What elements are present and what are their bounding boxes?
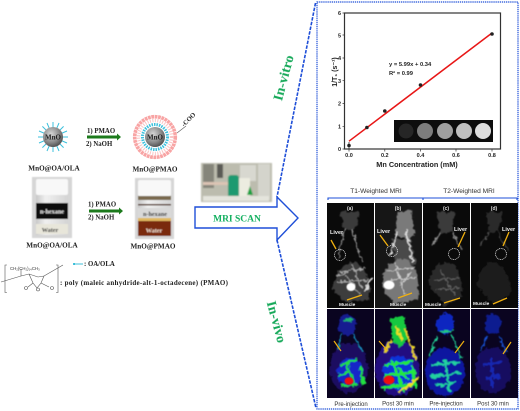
chart: relaxivity 1/T1 vs Mn concentration: 1/T₁ (s⁻¹) xyxy=(332,57,339,87)
captions: colour map panels: Pre-injection xyxy=(429,402,463,408)
labels: upper particle names: MnO@OA/OLA xyxy=(28,164,81,172)
captions: colour map panels: Pre-injection xyxy=(334,402,368,408)
vial photo: MnO@PMAO: Water xyxy=(146,228,162,234)
colour map panel b xyxy=(375,309,422,398)
colour map panel c xyxy=(423,309,470,398)
labels: vial names: MnO@PMAO xyxy=(130,242,176,250)
MRI panel a: (a) xyxy=(347,206,353,212)
dashed connector lines and in-vivo box xyxy=(277,2,518,409)
MRI panel a: Muscle xyxy=(339,302,356,308)
headings: T1 and T2 weighted MRI: T2-Weighted MRI xyxy=(443,188,495,195)
x axis ticks xyxy=(345,153,496,159)
colour map panel d xyxy=(471,309,518,398)
polymer structure: PMAO xyxy=(1,265,63,292)
MRI panel d: (d) xyxy=(491,206,498,212)
particle: MnO@PMAO xyxy=(135,111,197,157)
vial photo: MnO@PMAO: n-hexane xyxy=(143,211,167,218)
particle: MnO@PMAO: MnO xyxy=(147,134,164,142)
MRI panel b: Muscle xyxy=(390,302,407,308)
equation: y = 5.99x + 0.34 xyxy=(389,62,432,68)
MRI panel b: Liver xyxy=(377,229,391,235)
arrow: reaction step 1: 2) NaOH xyxy=(86,141,113,148)
y axis ticks: 2 xyxy=(338,102,341,108)
MRI panel d: Liver xyxy=(502,227,516,233)
colour map panel a xyxy=(327,309,374,398)
y axis ticks: 0 xyxy=(338,147,341,153)
MRI panel d: Muscle xyxy=(473,301,490,307)
labels: upper particle names xyxy=(28,164,178,174)
MRI panel c: Liver xyxy=(454,227,468,233)
headings: T1 and T2 weighted MRI xyxy=(328,188,517,200)
arrow: reaction step 1 xyxy=(86,128,121,148)
labels: upper particle names: MnO@PMAO xyxy=(132,166,178,174)
arrow: reaction step 2 xyxy=(88,202,123,222)
labels: vial names: MnO@OA/OLA xyxy=(26,242,79,250)
MRI panel a: Liver xyxy=(330,230,344,236)
vial photo: MnO@PMAO xyxy=(135,178,174,239)
arrow: reaction step 2: 2) NaOH xyxy=(88,214,115,222)
label: PMAO description: : poly (maleic anhydride-alt-1-octadecene) (PMAO) xyxy=(60,279,229,287)
label: In-vitro: In-vitro xyxy=(271,54,298,102)
photo: MRI scanner xyxy=(201,163,272,202)
chart: relaxivity 1/T1 vs Mn concentration xyxy=(332,11,500,169)
y axis ticks: 6 xyxy=(338,11,341,17)
liver marker xyxy=(334,250,346,260)
y axis ticks: 3 xyxy=(338,79,341,85)
big arrow: MRI SCAN xyxy=(195,197,298,240)
vial photo: MnO@OA/OLA xyxy=(32,177,72,238)
y axis ticks: 1 xyxy=(338,124,341,130)
x axis ticks: 0.4 xyxy=(417,153,425,159)
chart: relaxivity 1/T1 vs Mn concentration: R² = 0.99 xyxy=(389,70,414,77)
legend: OA/OLA: : OA/OLA xyxy=(84,261,115,268)
MRI panel c xyxy=(423,203,470,308)
label: polymer side chain: CH₂(CH₂)₁₄CH₃ xyxy=(10,266,40,271)
MRI panel c: (c) xyxy=(443,206,449,212)
captions: colour map panels: Post 30 min xyxy=(382,402,414,408)
x axis ticks: 0.2 xyxy=(381,153,389,159)
label: -COO: -COO xyxy=(180,111,197,128)
data points xyxy=(347,32,494,147)
particle: MnO@OA/OLA xyxy=(38,122,68,152)
MRI panel b: (b) xyxy=(395,206,402,212)
big arrow: MRI SCAN: MRI SCAN xyxy=(213,214,261,224)
label: MnO core: MnO xyxy=(45,134,62,142)
captions: colour map panels xyxy=(334,402,509,408)
vial photo: MnO@OA/OLA: n-hexane xyxy=(40,208,64,216)
x axis ticks: 0.0 xyxy=(345,153,353,159)
axis titles: Mn Concentration (mM) xyxy=(376,160,458,169)
fit line xyxy=(349,33,492,141)
label: In-vivo: In-vivo xyxy=(263,300,288,345)
MRI panel d xyxy=(471,203,518,308)
captions: colour map panels: Post 30 min xyxy=(477,402,509,408)
arrow: reaction step 1: 1) PMAO xyxy=(87,128,115,135)
MRI panel c: Muscle xyxy=(425,302,442,308)
labels: vial names xyxy=(26,242,176,250)
MRI panel a xyxy=(327,203,374,308)
x axis ticks: 0.8 xyxy=(488,153,496,159)
x axis ticks: 0.6 xyxy=(452,153,460,159)
y axis ticks: 5 xyxy=(338,34,341,40)
MRI panel b xyxy=(375,203,422,308)
headings: T1 and T2 weighted MRI: T1-Weighted MRI xyxy=(350,188,402,195)
y axis ticks xyxy=(338,11,342,153)
arrow: reaction step 2: 1) PMAO xyxy=(88,202,116,208)
inset: phantom images xyxy=(394,120,493,142)
y axis ticks: 4 xyxy=(338,56,342,62)
vial photo: MnO@OA/OLA: Water xyxy=(42,227,58,234)
